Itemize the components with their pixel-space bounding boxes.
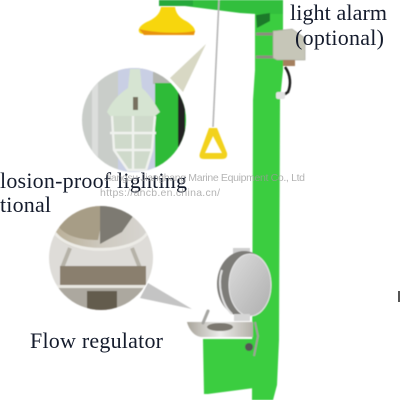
shower head rim [139,29,195,35]
upper dish [56,217,145,248]
arms [62,248,140,268]
edge mark [398,291,400,302]
alarm box fitting [283,60,295,66]
cable connector [276,92,285,99]
light alarm box [273,29,305,60]
base rim [50,285,154,288]
side valve handle [254,322,258,356]
dish highlight [100,204,136,244]
dark edge [178,92,185,147]
green pole [252,0,283,400]
dish lip [55,232,148,249]
basin lid rim highlight [220,270,232,314]
center stem [87,291,117,313]
regulator contents [55,205,147,311]
valve knob [245,343,253,351]
lamp glass [112,115,155,170]
watermark url: https://ahcb.en.china.cn/ [100,187,220,199]
pull rod [213,0,219,127]
basin bowl [187,322,253,337]
green post [155,83,189,175]
dish shadow [59,206,100,240]
lid lower hinge [234,314,250,321]
alarm cable [282,67,290,96]
heading: optional: (optional) [295,25,384,50]
wall sky [118,66,156,174]
watermark company: Jiangsu Jianghang Marine Equipment Co., Ltd [104,172,305,184]
basin lever [203,311,208,323]
basin support box [203,339,254,394]
label: explosion-proof lighting: losion-proof lighting [0,168,187,193]
basin lid rim [217,251,271,317]
yellow shower head [139,7,195,34]
label: flow regulator: Flow regulator [30,328,164,353]
callout pointer [170,44,206,92]
eyewash station [139,0,305,400]
regulator circle [49,206,153,310]
lamp cage [110,116,156,170]
callout pointer [140,283,192,309]
lower fitting [60,266,146,286]
basin lid hinge tab [233,248,250,254]
pull handle [200,128,227,159]
label: optional: tional [0,192,51,217]
beam shadow [256,13,270,28]
panel: flow regulator callout [48,200,192,314]
lamp fittings [133,97,138,110]
lamp scene contents [92,66,189,175]
lamp body [107,69,160,116]
wall stripe [92,84,98,156]
basin drain [207,323,233,331]
heading: light alarm: light alarm [290,0,387,25]
basin lid [229,254,271,316]
base [58,288,144,308]
top beam [185,0,283,14]
pole clamps [256,34,274,57]
panel: lighting callout [82,44,206,175]
shower head connector [159,0,193,6]
gray block [152,72,170,84]
lamp scene circle [82,68,186,172]
